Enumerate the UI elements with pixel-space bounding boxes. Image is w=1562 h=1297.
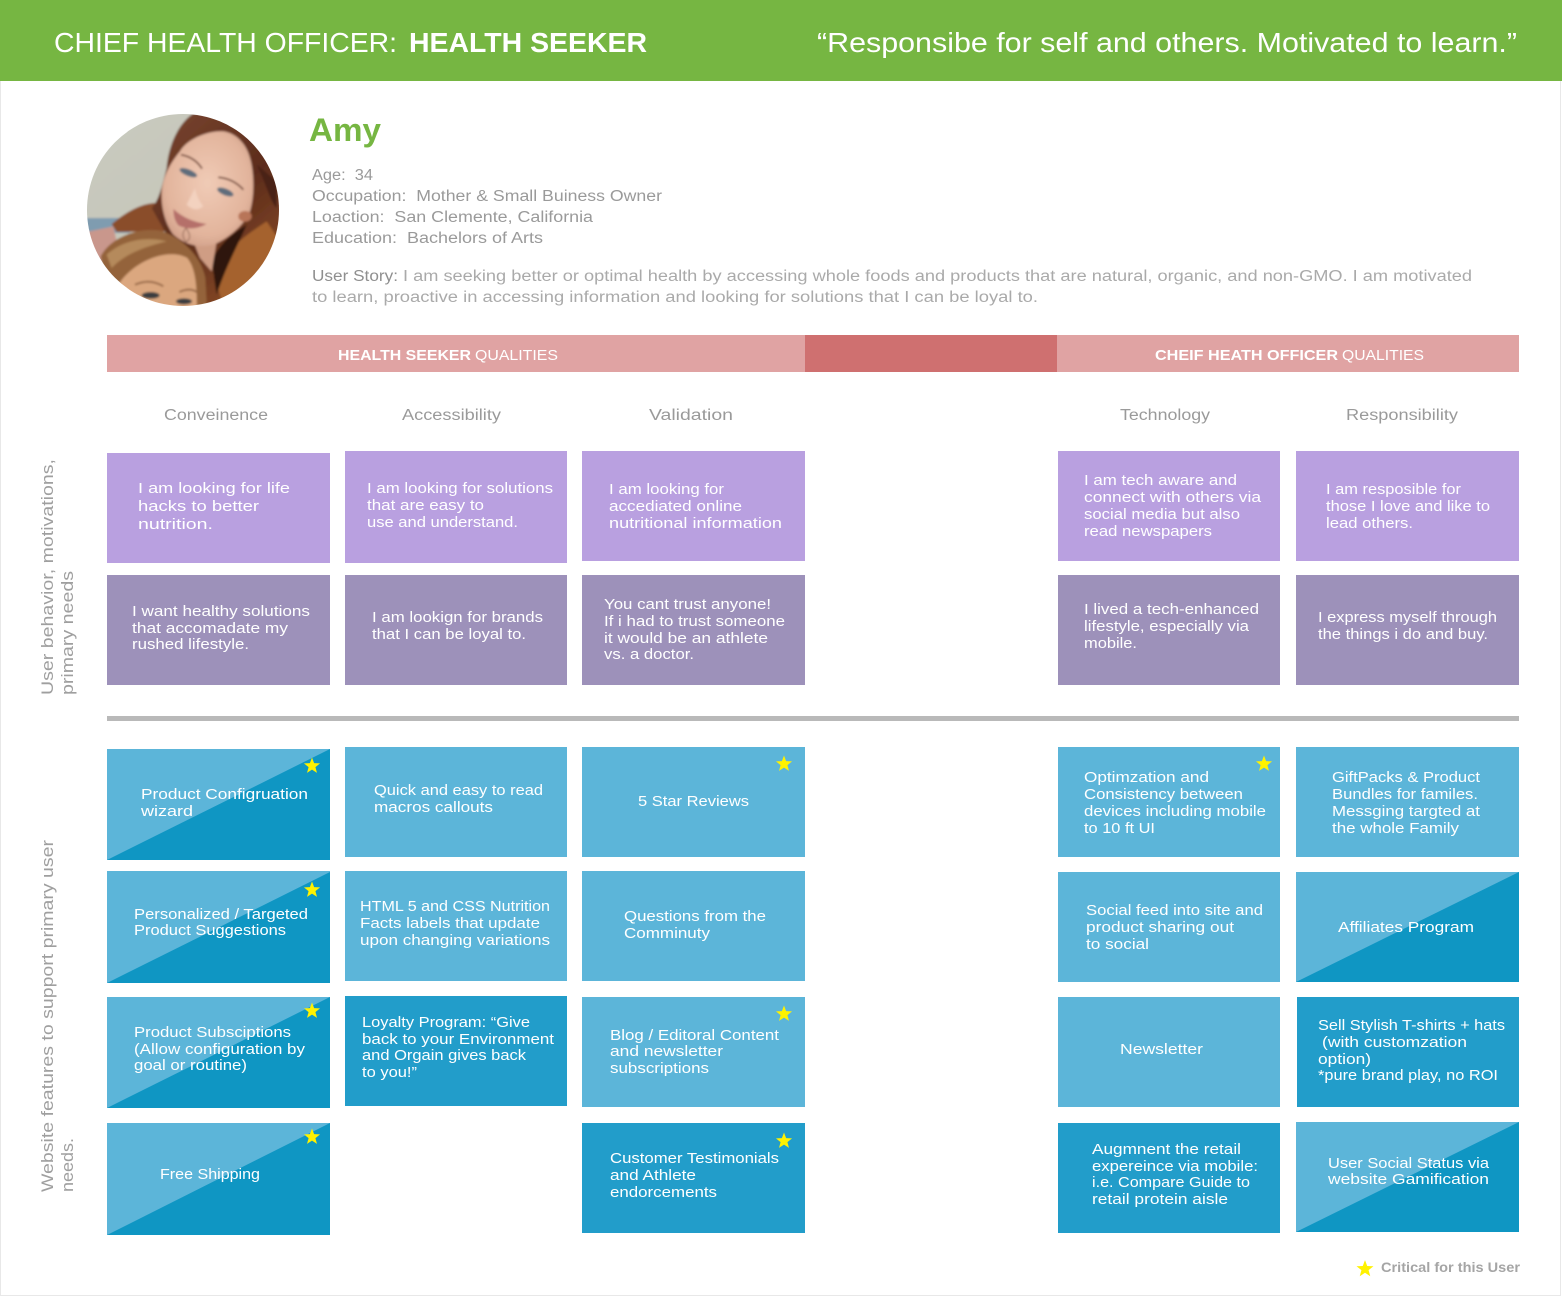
feature card: testimonials <box>582 1123 805 1233</box>
feature card: nutrition facts labels: Facts labels that update <box>360 915 540 932</box>
feature card: social feed: Social feed into site and <box>1086 902 1263 919</box>
behavior card: life hacks: I am looking for life <box>138 480 290 497</box>
column heading: Validation: Validation <box>649 407 733 424</box>
motivation card: loyal brands: I am lookign for brands <box>372 609 543 626</box>
feature card: affiliates program <box>1296 872 1519 982</box>
motivation card: tech lifestyle: mobile. <box>1084 635 1137 652</box>
feature card: product subscriptions <box>107 997 330 1108</box>
behavior card: responsible <box>1296 451 1519 561</box>
persona demographics: Education: Bachelors of Arts <box>312 230 543 247</box>
star: critical <box>304 882 320 897</box>
feature card: gift packs: the whole Family <box>1332 820 1460 837</box>
row label: user behavior: primary needs <box>58 571 77 695</box>
feature card: macros callouts <box>345 747 567 857</box>
feature card: testimonials: endorcements <box>610 1184 717 1201</box>
feature card: augment retail: retail protein aisle <box>1092 1191 1228 1208</box>
persona demographics <box>312 167 662 247</box>
behavior card: tech aware: read newspapers <box>1084 523 1212 540</box>
behavior card: easy solutions: I am looking for solutions <box>367 480 553 497</box>
feature card: augment retail: expereince via mobile: <box>1092 1158 1258 1175</box>
feature card: blog and newsletter <box>582 997 805 1107</box>
feature card: macros callouts: Quick and easy to read <box>374 782 543 799</box>
row label: website features: needs. <box>58 1138 77 1192</box>
feature card: optimization and consistency: Consistency between <box>1084 786 1243 803</box>
feature card: augment retail <box>1058 1123 1280 1233</box>
user story: I am seeking better or optimal health by accessing whole foods and products that are natural, organic, and non-GMO. I am motivated <box>403 268 1472 285</box>
feature card: community questions: Comminuty <box>624 925 711 942</box>
behavior card: responsible: I am resposible for <box>1326 481 1461 498</box>
header title: CHIEF HEALTH OFFICER: <box>54 27 397 58</box>
row label: user behavior: User behavior, motivations, <box>38 459 57 695</box>
motivation card: self expression <box>1296 575 1519 685</box>
behavior card: tech aware: social media but also <box>1084 506 1240 523</box>
motivation card: tech lifestyle: lifestyle, especially via <box>1084 618 1250 635</box>
feature card: optimization and consistency: to 10 ft UI <box>1084 820 1155 837</box>
feature card: product subscriptions: Product Subsciptions <box>134 1024 291 1041</box>
feature card: free shipping: Free Shipping <box>160 1166 260 1183</box>
user story: User Story: <box>312 268 398 285</box>
motivation card: loyal brands: that I can be loyal to. <box>372 626 526 643</box>
feature card: stylish t-shirts: option) <box>1318 1051 1371 1068</box>
behavior card: life hacks <box>107 453 330 563</box>
star: critical <box>776 1006 792 1021</box>
feature card: gamification: User Social Status via <box>1328 1155 1490 1172</box>
motivation card: trust: You cant trust anyone! <box>604 596 771 613</box>
persona name: Amy <box>309 112 381 148</box>
feature card: product subscriptions: goal or routine) <box>134 1057 247 1074</box>
feature card: social feed: product sharing out <box>1086 919 1235 936</box>
feature card: gamification: website Gamification <box>1327 1171 1489 1188</box>
feature card: blog and newsletter: Blog / Editoral Content <box>610 1027 780 1044</box>
feature card: blog and newsletter: and newsletter <box>610 1043 723 1060</box>
column heading: Accessibility: Accessibility <box>402 407 501 424</box>
feature card: nutrition facts labels: HTML 5 and CSS Nutrition <box>360 898 550 915</box>
star: critical <box>304 758 320 773</box>
feature card: free shipping <box>107 1123 330 1235</box>
feature card: gift packs: GiftPacks & Product <box>1332 769 1481 786</box>
feature card: testimonials: Customer Testimonials <box>610 1150 779 1167</box>
qualities band <box>107 335 1519 372</box>
feature card: product configuration wizard: Product Configruation <box>141 786 308 803</box>
feature card: personalized suggestions: Product Suggestions <box>134 922 286 939</box>
chief health officer qualities label: QUALITIES <box>1342 347 1424 364</box>
feature card: social feed: to social <box>1086 936 1149 953</box>
behavior card: responsible: those I love and like to <box>1326 498 1490 515</box>
feature card: 5 star reviews <box>582 747 805 857</box>
star: critical <box>304 1002 320 1018</box>
feature card: newsletter: Newsletter <box>1120 1041 1203 1058</box>
star: critical <box>1256 756 1272 771</box>
behavior card: tech aware <box>1058 451 1280 561</box>
legend: critical for this user: Critical for this User <box>1381 1259 1521 1275</box>
feature card: gift packs: Bundles for familes. <box>1332 786 1478 803</box>
feature card: loyalty program: to you!” <box>362 1064 417 1081</box>
motivation card: trust: it would be an athlete <box>604 630 768 647</box>
feature card: stylish t-shirts: *pure brand play, no ROI <box>1318 1067 1498 1084</box>
row label: website features: Website features to support primary user <box>38 840 57 1192</box>
row label: user behavior <box>38 459 77 695</box>
feature card: blog and newsletter: subscriptions <box>610 1060 709 1077</box>
motivation card: trust <box>582 575 805 685</box>
persona demographics: Loaction: San Clemente, California <box>312 209 593 226</box>
user story: to learn, proactive in accessing information and looking for solutions that I can be loyal to. <box>312 289 1038 306</box>
feature card: loyalty program: back to your Environment <box>362 1031 555 1048</box>
behavior card: nutritional information: accediated online <box>609 498 742 515</box>
feature card: macros callouts: macros callouts <box>374 799 493 816</box>
behavior card: responsible: lead others. <box>1326 515 1413 532</box>
feature card: community questions: Questions from the <box>624 908 766 925</box>
feature card: social feed <box>1058 872 1280 982</box>
feature card: product configuration wizard <box>107 749 330 860</box>
behavior card: tech aware: connect with others via <box>1084 489 1262 506</box>
feature card: augment retail: Augmnent the retail <box>1092 1141 1241 1158</box>
behavior card: life hacks: hacks to better <box>138 498 259 515</box>
feature card: optimization and consistency: Optimzation and <box>1084 769 1209 786</box>
chief health officer qualities label: CHEIF HEATH OFFICER <box>1155 347 1338 364</box>
health seeker qualities label: HEALTH SEEKER <box>338 347 471 364</box>
feature card: product configuration wizard: wizard <box>140 803 193 820</box>
motivation card: tech lifestyle: I lived a tech-enhanced <box>1084 601 1259 618</box>
row label: website features <box>38 840 77 1192</box>
motivation card: loyal brands <box>345 575 567 685</box>
feature card: optimization and consistency <box>1058 747 1280 857</box>
feature card: nutrition facts labels: upon changing variations <box>360 932 550 949</box>
column heading: Technology: Technology <box>1120 407 1210 424</box>
feature card: 5 star reviews: 5 Star Reviews <box>638 793 749 810</box>
persona demographics: Age: 34 <box>312 167 373 184</box>
feature card: testimonials: and Athlete <box>610 1167 696 1184</box>
star: critical <box>776 756 792 771</box>
feature card: gift packs: Messging targted at <box>1332 803 1481 820</box>
behavior card: nutritional information <box>582 451 805 561</box>
column heading: Responsibility: Responsibility <box>1346 407 1458 424</box>
feature card: personalized suggestions: Personalized / Targeted <box>134 906 308 923</box>
behavior card: easy solutions: that are easy to <box>367 497 484 514</box>
feature card: gamification <box>1296 1122 1519 1232</box>
motivation card: trust: vs. a doctor. <box>604 646 694 663</box>
star: critical <box>304 1128 320 1144</box>
feature card: augment retail: i.e. Compare Guide to <box>1092 1174 1250 1191</box>
feature card: stylish t-shirts: (with customzation <box>1322 1034 1467 1051</box>
motivation card: trust: If i had to trust someone <box>604 613 785 630</box>
chief health officer qualities label <box>1155 347 1424 364</box>
health seeker qualities label <box>338 347 558 364</box>
motivation card: tech lifestyle <box>1058 575 1280 685</box>
motivation card: healthy solutions: that accomadate my <box>132 620 289 637</box>
feature card: affiliates program: Affiliates Program <box>1338 919 1474 936</box>
feature card: gift packs <box>1296 747 1519 857</box>
feature card: stylish t-shirts <box>1297 997 1519 1107</box>
motivation card: healthy solutions: rushed lifestyle. <box>132 636 249 653</box>
feature card: loyalty program <box>345 996 567 1106</box>
feature card: stylish t-shirts: Sell Stylish T-shirts + hats <box>1318 1017 1505 1034</box>
feature card: newsletter <box>1058 997 1280 1107</box>
feature card: loyalty program: and Orgain gives back <box>362 1047 527 1064</box>
behavior card: easy solutions <box>345 451 567 563</box>
behavior card: tech aware: I am tech aware and <box>1084 472 1237 489</box>
feature card: loyalty program: Loyalty Program: “Give <box>362 1014 530 1031</box>
motivation card: healthy solutions: I want healthy solutions <box>132 603 310 620</box>
column heading: Conveinence: Conveinence <box>164 407 268 424</box>
feature card: community questions <box>582 871 805 981</box>
motivation card: healthy solutions <box>107 575 330 685</box>
header banner <box>0 0 1562 81</box>
feature card: personalized suggestions <box>107 871 330 983</box>
feature card: nutrition facts labels <box>345 871 567 981</box>
feature card: optimization and consistency: devices including mobile <box>1084 803 1266 820</box>
user story <box>312 268 1472 306</box>
behavior card: easy solutions: use and understand. <box>367 514 518 531</box>
header persona name: HEALTH SEEKER <box>409 27 647 58</box>
behavior card: nutritional information: I am looking for <box>609 481 724 498</box>
motivation card: self expression: I express myself through <box>1318 609 1497 626</box>
motivation card: self expression: the things i do and buy. <box>1318 626 1488 643</box>
star: critical <box>776 1132 792 1148</box>
header quote: “Responsibe for self and others. Motivated to learn.” <box>817 27 1517 58</box>
behavior card: nutritional information: nutritional information <box>609 515 782 532</box>
health seeker qualities label: QUALITIES <box>475 347 558 364</box>
feature card: product subscriptions: (Allow configuration by <box>134 1041 306 1058</box>
portrait photo of Amy <box>87 114 279 306</box>
persona demographics: Occupation: Mother & Small Buiness Owner <box>312 188 662 205</box>
behavior card: life hacks: nutrition. <box>138 516 213 533</box>
